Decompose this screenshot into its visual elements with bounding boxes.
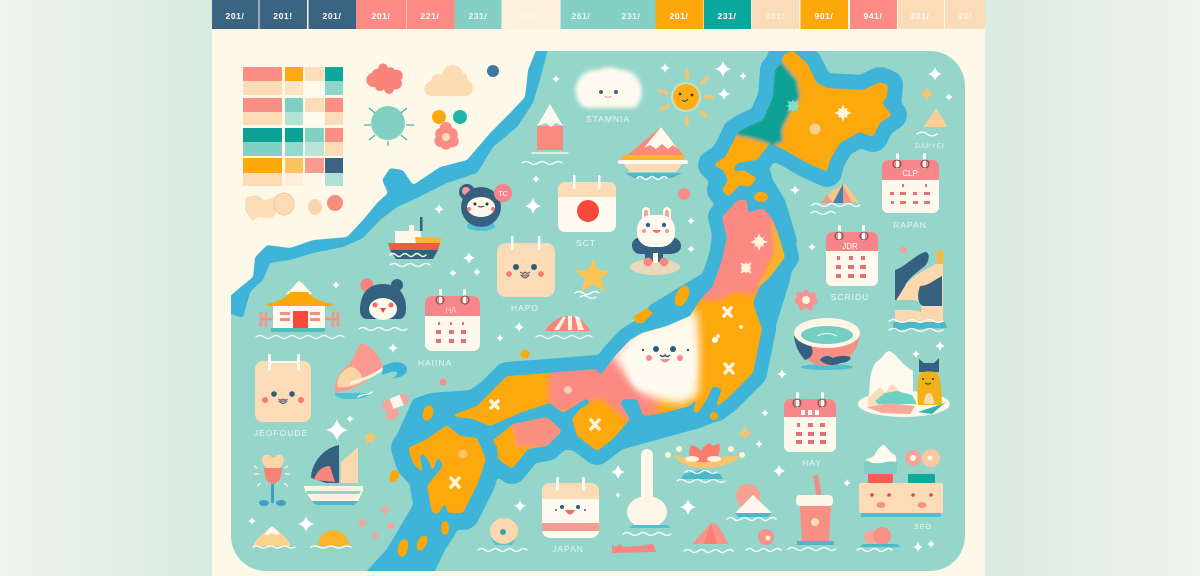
top year bar: 901/ [815, 11, 834, 21]
icon: starfish [574, 259, 611, 298]
label: stamina: STAMNIA [586, 114, 630, 124]
sea panel [231, 51, 965, 571]
blue sea halo [363, 51, 892, 575]
top year bar: 201/ [226, 11, 245, 21]
calendar: jan: JDR [842, 242, 858, 251]
label: seo: SEO [914, 524, 932, 531]
calendar: clp: CLP [902, 169, 918, 178]
label: hapo: HAPO [511, 303, 539, 313]
top year bar: 201! [273, 11, 293, 21]
icon: spoon [623, 449, 671, 536]
icon: red pencil mountain [522, 104, 568, 164]
icon: orange star [363, 430, 377, 444]
icon: small peak [917, 108, 947, 136]
calendar: clp [882, 153, 939, 213]
top year bar: 941/ [864, 11, 883, 21]
top year bar: 231/ [718, 11, 737, 21]
map flowers and marks [451, 95, 853, 487]
top year bar: 201/ [323, 11, 342, 21]
top year bar: 201/ [521, 11, 540, 21]
calendar with face: japan [542, 477, 599, 538]
label: scridu: SCRIDU [831, 292, 869, 302]
islets [388, 192, 768, 558]
sparkles [248, 61, 953, 552]
Hokkaido teal region [737, 62, 800, 145]
icon: peach cloud [424, 65, 473, 96]
icon: pink flower [434, 122, 459, 150]
icon: boat [388, 217, 442, 266]
icon: coral mountain [684, 523, 733, 552]
icon: orange dome [311, 530, 351, 548]
icon: smiling sun [660, 71, 712, 124]
icon: drink cup [788, 475, 836, 550]
icon: fan shell [536, 316, 592, 338]
icon: coral dot [440, 378, 446, 386]
icon: mountain on ship [618, 127, 688, 180]
top year bar: 261/ [572, 11, 591, 21]
icon: coral island [612, 544, 656, 553]
icon: donut [478, 518, 527, 552]
page sheet [212, 0, 985, 576]
icon: sailboat [304, 445, 363, 505]
palette blobs [245, 193, 343, 221]
icon: roses [857, 527, 900, 552]
icon: temple [256, 281, 344, 338]
icon: lotus [665, 443, 745, 482]
top year bar: 221/ [421, 11, 440, 21]
icon: navy dot [487, 65, 499, 77]
label: hay: HAY [802, 458, 822, 468]
calendar: ha [425, 289, 480, 351]
icon: striped tent [811, 184, 860, 214]
label: sct: SCT [576, 238, 596, 248]
icon: wavy stripes [889, 250, 947, 332]
label: jeofoude: JEOFOUDE [254, 428, 308, 438]
top year bar: 231/ [469, 11, 488, 21]
cream land top-left [225, 40, 537, 298]
face on central Japan [642, 346, 689, 362]
palette swatch grid [243, 67, 343, 186]
icon: orange dot [432, 110, 446, 124]
label: rapan: RAPAN [893, 220, 927, 230]
icon: mouse character: TC [498, 191, 508, 198]
icon: bowl [794, 318, 860, 370]
icon: mouse character [459, 184, 512, 231]
top year bar: 20/ [958, 11, 972, 21]
icon: round flower [746, 529, 781, 552]
calendar: may [784, 392, 836, 452]
background right [985, 0, 1200, 576]
icon: peach calendar blob mountain [727, 484, 776, 520]
icon: teal dot [453, 110, 467, 124]
calendar with peach face [255, 354, 311, 422]
icon: mint sun [364, 106, 414, 146]
icon: penguin [359, 278, 407, 330]
icon: coral dot [678, 188, 690, 200]
top year bar: 201/ [911, 11, 930, 21]
icon: bandage pieces [380, 392, 410, 422]
icon: rabbit character [630, 207, 681, 275]
icon: coral flower [366, 63, 403, 94]
coast: western sea band [225, 45, 549, 318]
mainland shapes [408, 51, 892, 514]
icon: mountain plate with character [858, 351, 950, 417]
top year bar [212, 0, 985, 29]
icon: pink flower [794, 289, 818, 311]
icon: shell wave [335, 343, 407, 399]
background left [0, 0, 212, 576]
label: peak caption: DAPYEI [915, 143, 945, 150]
calendar with peach face [497, 236, 555, 297]
calendar: jan [826, 225, 878, 286]
icon: peach mountain [253, 526, 295, 548]
top year bar: 201/ [766, 11, 785, 21]
label: japan: JAPAN [552, 544, 584, 554]
calendar with red sun [558, 175, 616, 232]
icon: small coral dot [900, 246, 906, 254]
icon: white cloud with face [576, 67, 642, 108]
top year bar: 201/ [372, 11, 391, 21]
top year bar: 231/ [622, 11, 641, 21]
calendar: ha: HA [445, 306, 457, 315]
label: haiina: HAIINA [418, 358, 452, 368]
icon: block with faces and mountain [859, 445, 943, 517]
pink diamonds [356, 504, 394, 540]
top year bar: 201/ [670, 11, 689, 21]
icon: tulip [254, 455, 290, 506]
japan map [363, 51, 892, 575]
